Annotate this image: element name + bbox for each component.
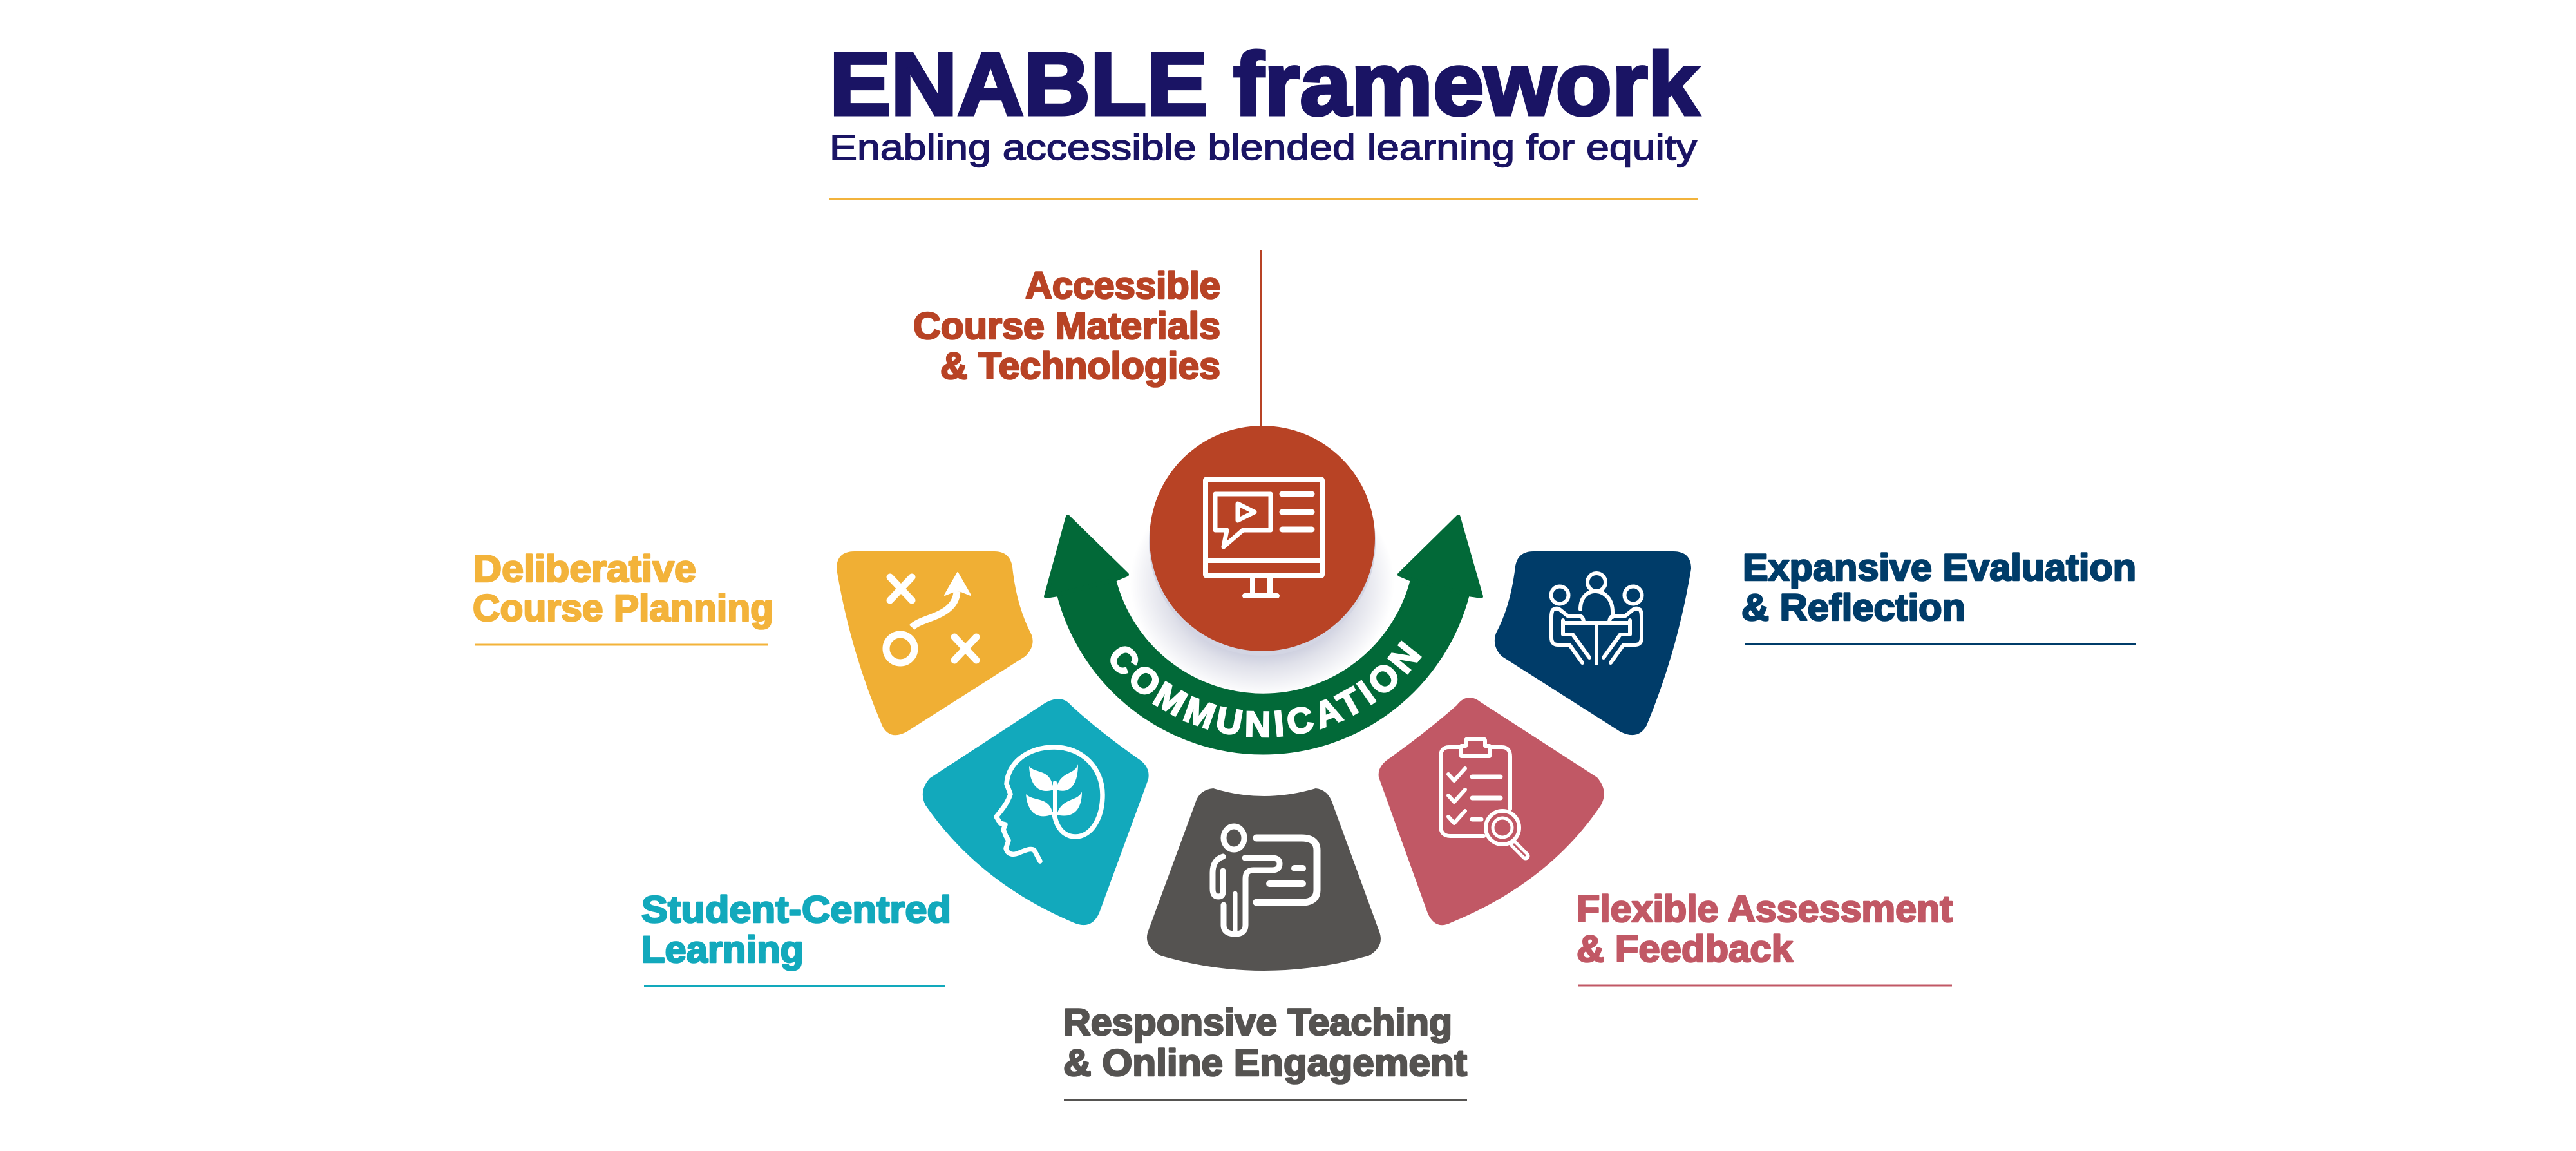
label: Accessible Course Materials & Technologies: Accessible (1025, 265, 1220, 307)
label: Student-Centred Learning (641, 889, 951, 987)
icon: clipboard with magnifier (1441, 739, 1526, 856)
icon: presenter at board (1213, 826, 1317, 934)
icon: monitor with video (1206, 479, 1322, 596)
subtitle: Enabling accessible blended learning for equity (829, 127, 1697, 167)
panel: accessible course materials circle (1150, 426, 1375, 651)
label: Responsive Teaching & Online Engagement: Responsive Teaching (1063, 1002, 1452, 1043)
label: Accessible Course Materials & Technologies (913, 265, 1220, 387)
label: Flexible Assessment & Feedback (1577, 888, 1953, 987)
label: Expansive Evaluation & Reflection (1741, 547, 2136, 645)
panel: responsive teaching tile (1147, 788, 1381, 971)
label: Student-Centred Learning: Learning (641, 929, 804, 971)
label: Deliberative Course Planning (473, 548, 773, 645)
label: Student-Centred Learning: Student-Centred (641, 889, 951, 931)
label: Expansive Evaluation & Reflection: Expansive Evaluation (1743, 547, 2136, 589)
panel: deliberative course planning tile (837, 551, 1033, 735)
label: Accessible Course Materials & Technologies: Course Materials (913, 305, 1220, 347)
text: COMMUNICATION: COMMUNICATION (1110, 640, 1422, 738)
label: Deliberative Course Planning: Course Planning (473, 587, 773, 629)
label: Responsive Teaching & Online Engagement (1063, 1002, 1467, 1101)
label: Expansive Evaluation & Reflection: & Reflection (1741, 587, 1965, 629)
label: Responsive Teaching & Online Engagement: & Online Engagement (1063, 1042, 1467, 1084)
icon: meeting around a table (1551, 573, 1642, 663)
label: Flexible Assessment & Feedback: Flexible Assessment (1577, 888, 1953, 930)
circle shadow (1130, 429, 1394, 696)
label: Accessible Course Materials & Technologies: & Technologies (940, 345, 1220, 387)
label: Flexible Assessment & Feedback: & Feedback (1577, 928, 1794, 970)
arrow: communication arc (1044, 515, 1483, 755)
title: ENABLE framework (829, 35, 1699, 134)
icon: head with plant (996, 747, 1103, 861)
label: Deliberative Course Planning: Deliberative (473, 548, 696, 590)
icon: game plan (886, 573, 976, 663)
panel: flexible assessment tile (1379, 698, 1604, 925)
panel: student-centred learning tile (923, 699, 1149, 925)
panel: expansive evaluation tile (1495, 551, 1691, 735)
